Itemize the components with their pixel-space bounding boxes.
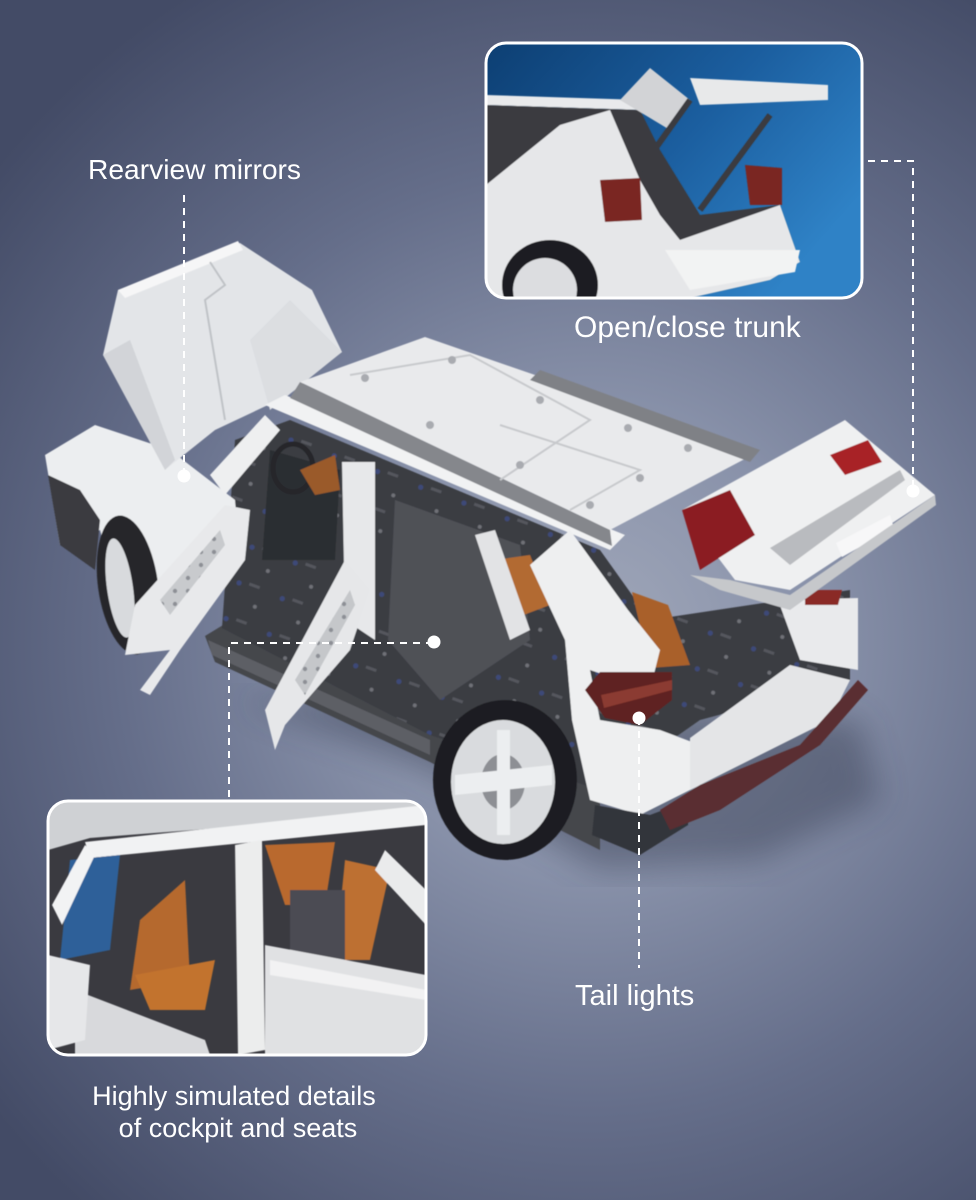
car shadow — [240, 700, 880, 870]
car: front fender — [45, 425, 240, 658]
leader: cockpit and seats — [229, 636, 440, 797]
car: dark interior — [222, 420, 850, 790]
car: raised tailgate — [682, 420, 936, 610]
car: lower sill — [205, 622, 600, 850]
car: rear quarter panel — [530, 530, 700, 855]
car: rear left door — [265, 560, 370, 750]
leader: open/close trunk — [868, 161, 920, 498]
inset photo: open trunk — [486, 43, 862, 330]
leader: tail lights — [632, 712, 646, 968]
car: front left door — [125, 505, 250, 695]
car: bumper and boot floor — [660, 590, 868, 830]
front wheel — [89, 512, 167, 658]
leader: rearview mirrors — [178, 195, 190, 482]
label: highly simulated details: of cockpit and seats — [119, 1113, 357, 1143]
label: open/close trunk: Open/close trunk — [574, 311, 802, 344]
inset photo: cockpit and seats — [48, 801, 426, 1055]
label: tail lights: Tail lights — [575, 980, 694, 1012]
label: rearview mirrors: Rearview mirrors — [88, 153, 301, 185]
car: raised hood — [103, 241, 342, 470]
car: roof — [290, 337, 760, 546]
main car model — [45, 241, 936, 860]
car: steering wheel — [273, 444, 313, 492]
roof studs — [361, 356, 692, 509]
car: rear wheel — [433, 700, 577, 860]
car: orange seats — [495, 555, 550, 622]
car: door frame and roof rail — [210, 395, 625, 640]
label: highly simulated details: Highly simulated details — [92, 1081, 376, 1111]
